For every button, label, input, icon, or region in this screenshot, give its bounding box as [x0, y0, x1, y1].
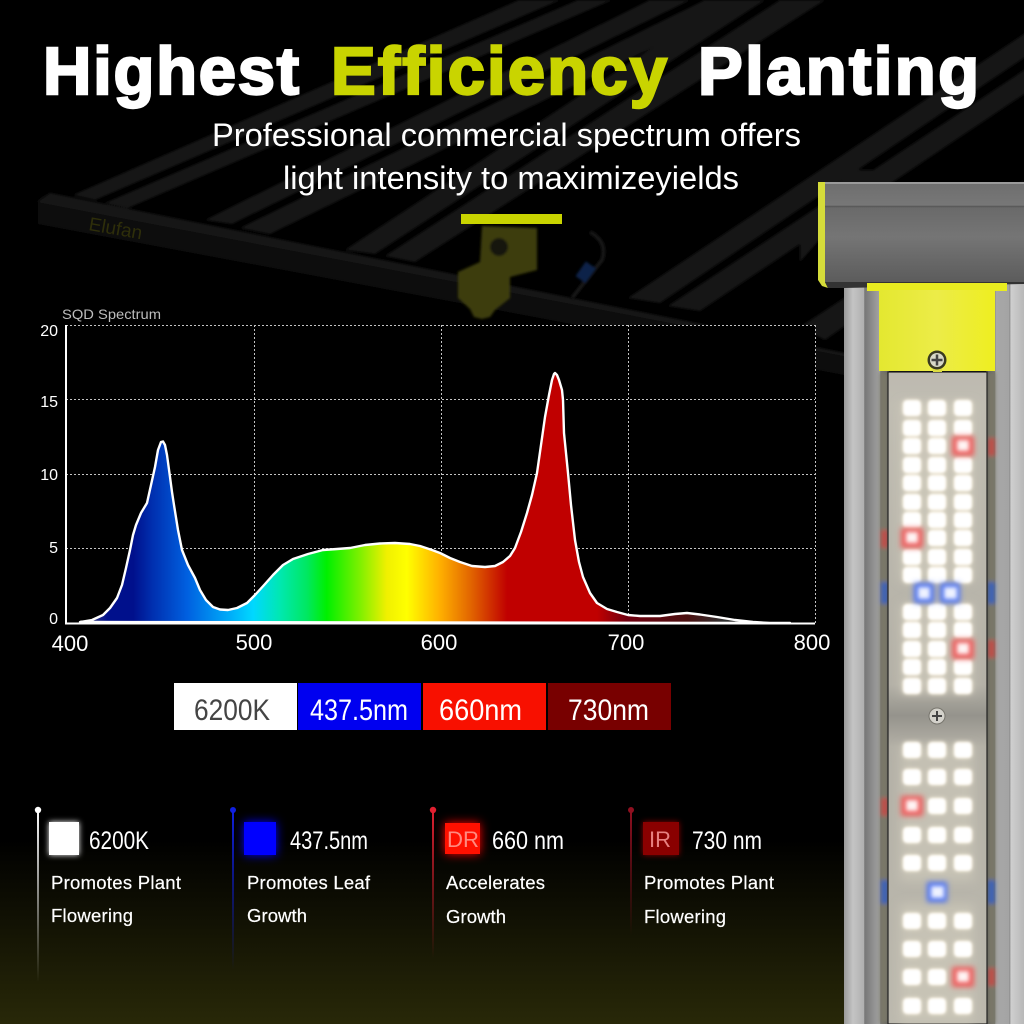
item: 6200K: Flowering — [51, 905, 133, 926]
legend 660nm — [423, 683, 546, 730]
title: Highest — [43, 34, 299, 109]
item: 660 nm: Accelerates — [446, 872, 545, 893]
middle screw — [929, 708, 945, 724]
colour legend bar — [174, 683, 671, 730]
y axis labels: 20 — [40, 323, 58, 340]
background lamp frame — [38, 0, 1024, 376]
item: 730 nm: 730 nm — [692, 827, 762, 855]
legend 730nm: 730nm — [568, 694, 649, 727]
y axis labels — [40, 323, 58, 628]
gridlines — [66, 325, 816, 623]
y axis labels: 15 — [40, 394, 58, 411]
item: 437.5nm: Promotes Leaf — [247, 872, 371, 893]
spectrum curve — [80, 373, 790, 623]
y axis labels: 5 — [49, 540, 58, 557]
title: Planting — [698, 34, 979, 109]
LED panel — [888, 372, 987, 1024]
subtitle: light intensity to maximizeyields — [283, 160, 739, 196]
item: 6200K: Promotes Plant — [51, 872, 181, 893]
item: 6200K: 6200K — [89, 827, 149, 855]
LED grow light fixture — [818, 182, 1024, 1024]
item: 730 nm — [628, 807, 774, 935]
legend 437.5nm — [298, 683, 421, 730]
legend 730nm — [548, 683, 671, 730]
bottom olive glow — [0, 840, 1024, 1024]
x axis labels: 400 — [52, 631, 88, 656]
axes — [66, 325, 815, 624]
spectrum chart — [40, 306, 830, 656]
item: 660 nm: Growth — [446, 906, 506, 927]
item: 437.5nm: Growth — [247, 905, 307, 926]
right rail — [986, 282, 1024, 1024]
legend 660nm: 660nm — [439, 694, 522, 727]
legend 6200K: 6200K — [194, 694, 270, 727]
title — [43, 34, 979, 109]
white LEDs — [905, 402, 970, 1012]
x axis labels — [52, 630, 830, 656]
panel lit area — [900, 402, 974, 1024]
x axis labels: 600 — [421, 630, 457, 655]
x axis labels: 700 — [608, 630, 644, 655]
background frame brand text: Elufan — [87, 214, 144, 244]
title rule — [461, 214, 562, 224]
subtitle: Professional commercial spectrum offers — [212, 117, 801, 153]
item: 730 nm: Flowering — [644, 906, 726, 927]
item: 660 nm — [430, 807, 564, 958]
bracket screw — [928, 350, 946, 370]
y axis labels: 10 — [40, 467, 58, 484]
background yellow bracket — [458, 226, 604, 319]
item: 660 nm: 660 nm — [492, 827, 564, 855]
top housing — [818, 182, 1024, 288]
x axis labels: 500 — [236, 630, 272, 655]
item: 730 nm: Promotes Plant — [644, 872, 774, 893]
yellow bracket — [867, 283, 1007, 372]
blue LEDs — [914, 583, 960, 902]
subtitle — [212, 117, 801, 196]
legend 6200K — [174, 683, 297, 730]
item: 437.5nm — [230, 807, 371, 970]
item: 730 nm: IR — [649, 827, 671, 852]
title: Efficiency — [331, 34, 667, 109]
channel reflections — [880, 372, 995, 1024]
item: 660 nm: DR — [447, 827, 479, 852]
item: 437.5nm: 437.5nm — [290, 827, 368, 855]
x axis labels: 800 — [794, 630, 830, 655]
chart title: SQD Spectrum — [62, 306, 161, 322]
chart backdrop — [66, 325, 815, 623]
red LEDs — [901, 436, 974, 987]
item: 6200K — [35, 807, 181, 982]
legend 437.5nm: 437.5nm — [310, 694, 408, 727]
left rail — [844, 282, 889, 1024]
y axis labels: 0 — [49, 611, 58, 628]
